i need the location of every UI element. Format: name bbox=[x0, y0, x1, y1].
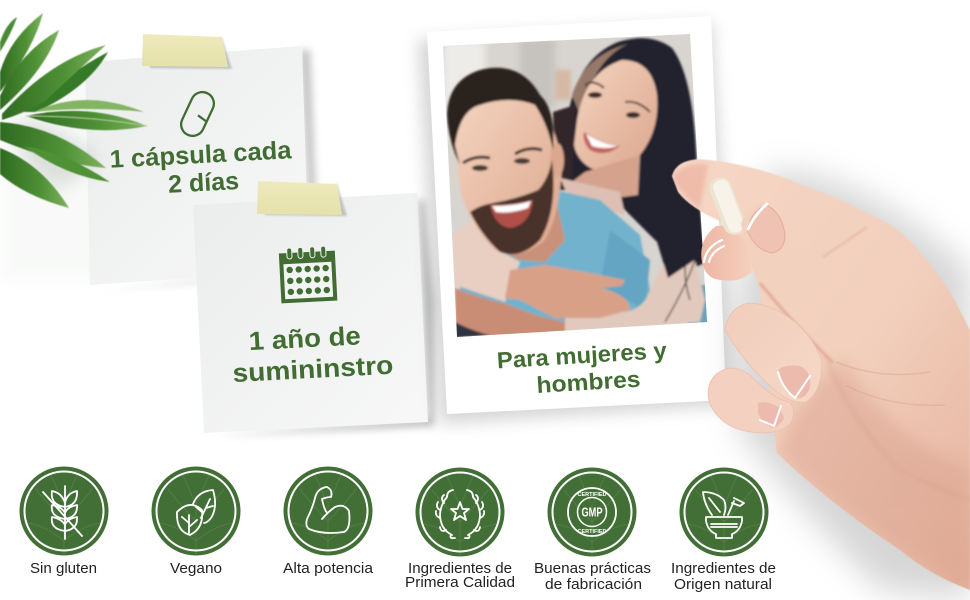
tape on note 1 bbox=[142, 34, 232, 69]
thumb nail bbox=[747, 205, 785, 253]
label: alta potencia: Alta potencia bbox=[283, 561, 374, 577]
sweater neck bbox=[560, 178, 625, 215]
man face bbox=[453, 99, 562, 254]
badge: vegano bbox=[152, 466, 240, 556]
panel: hand holding capsule bbox=[672, 159, 970, 590]
label: ingredientes de origen natural bbox=[671, 561, 776, 593]
label: buenas practicas de fabricacion bbox=[534, 561, 651, 593]
icon: two leaves bbox=[177, 490, 215, 535]
icon: flexed arm bbox=[306, 487, 349, 533]
forearm and hands bbox=[505, 265, 630, 318]
label: ingredientes de primera calidad: Primera Calidad bbox=[405, 575, 515, 591]
icon: wheat crossed bbox=[43, 486, 82, 539]
label: buenas practicas de fabricacion: Buenas prácticas bbox=[534, 561, 651, 577]
icon: gmp stamp: CERTIFIED bbox=[577, 492, 607, 498]
text: 1 capsula cada 2 dias: 1 cápsula cada bbox=[109, 136, 293, 174]
middle finger bbox=[725, 303, 822, 402]
badge: primera calidad bbox=[416, 468, 504, 556]
label: ingredientes de origen natural: Ingredientes de bbox=[671, 561, 776, 577]
text: para mujeres y hombres: hombres bbox=[536, 366, 641, 398]
icon: gmp stamp bbox=[568, 488, 616, 536]
photo: smiling couple bbox=[443, 34, 707, 337]
panel: polaroid bbox=[418, 16, 735, 424]
text: 1 ano de suministro: sumininstro bbox=[232, 350, 394, 388]
thumb bbox=[741, 203, 870, 372]
middle finger nail bbox=[778, 366, 810, 398]
icon: gmp stamp: CERTIFIED bbox=[577, 529, 607, 535]
icon: gmp stamp: GMP bbox=[582, 506, 602, 520]
hand shadow bbox=[734, 170, 970, 600]
label: buenas practicas de fabricacion: de fabricación bbox=[545, 577, 642, 593]
capsule bbox=[706, 174, 748, 238]
icon: mortar with leaf bbox=[703, 492, 744, 538]
leaves bbox=[0, 13, 147, 208]
woman face bbox=[574, 60, 657, 172]
shirt bbox=[460, 190, 652, 340]
palm and index finger bbox=[672, 159, 970, 590]
man hair bbox=[447, 68, 553, 165]
thumb underside crease bbox=[760, 283, 833, 363]
label: sin gluten: Sin gluten bbox=[30, 561, 97, 577]
man neck bbox=[508, 206, 566, 264]
woman sleeve right bbox=[564, 259, 706, 330]
text: para mujeres y hombres bbox=[496, 337, 669, 400]
man beard bbox=[470, 160, 554, 254]
text: 1 ano de suministro: 1 año de bbox=[248, 320, 361, 356]
text: 1 capsula cada 2 dias bbox=[109, 136, 295, 202]
label: ingredientes de primera calidad bbox=[405, 561, 515, 591]
ring finger bbox=[708, 368, 794, 433]
label: ingredientes de primera calidad: Ingredientes de bbox=[408, 561, 512, 577]
woman hair bbox=[563, 38, 706, 270]
badge: alta potencia bbox=[284, 466, 372, 556]
panel: note 2 one year supply bbox=[193, 193, 434, 436]
text: 1 ano de suministro bbox=[230, 319, 394, 388]
panel: note 1 capsule per 2 days bbox=[85, 46, 315, 290]
tape on note 2 bbox=[257, 181, 347, 216]
text: para mujeres y hombres: Para mujeres y bbox=[496, 337, 668, 373]
label: vegano: Vegano bbox=[170, 561, 222, 577]
badge: sin gluten bbox=[20, 466, 108, 556]
arm sleeve left bbox=[452, 215, 520, 302]
man ear bbox=[550, 143, 564, 177]
ring finger nail bbox=[758, 402, 784, 428]
badge: gmp certified bbox=[548, 468, 636, 556]
leaf background haze bbox=[0, 70, 100, 280]
icon: capsule bbox=[177, 88, 218, 140]
second finger bbox=[701, 225, 752, 281]
text: 1 capsula cada 2 dias: 2 días bbox=[167, 167, 240, 199]
man eyes bbox=[463, 149, 542, 163]
label: ingredientes de origen natural: Origen natural bbox=[674, 577, 772, 593]
icon: calendar bbox=[279, 246, 337, 303]
man mouth bbox=[490, 200, 533, 228]
hand shading bbox=[672, 164, 970, 590]
icon: laurel and star bbox=[436, 490, 484, 538]
badge: origen natural bbox=[680, 468, 768, 556]
